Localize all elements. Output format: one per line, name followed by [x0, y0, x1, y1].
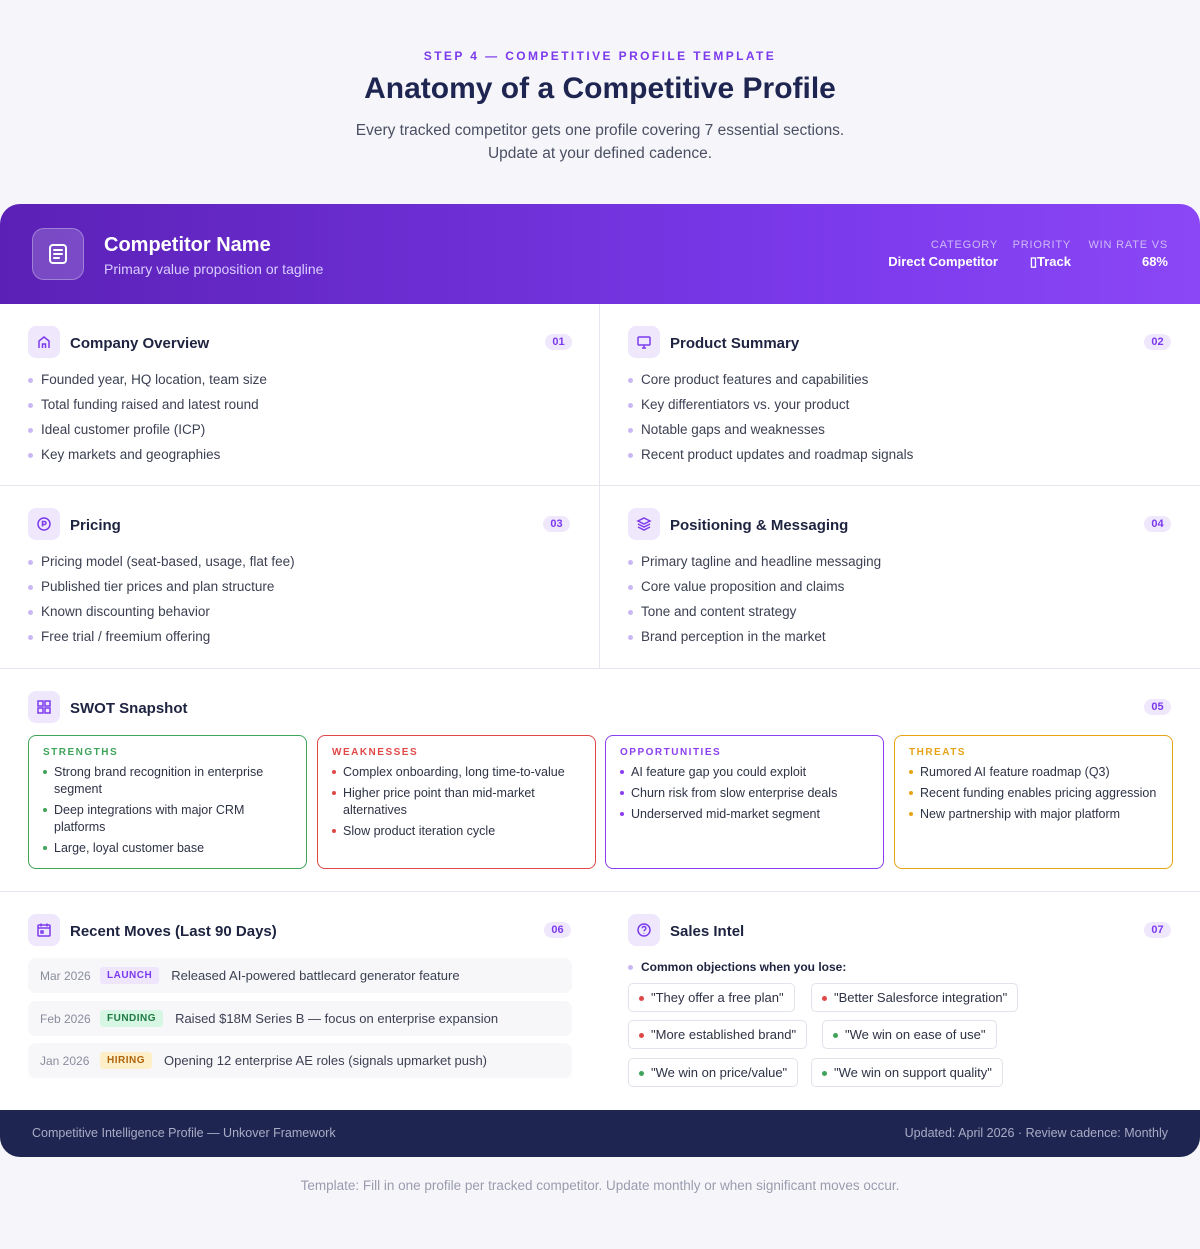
swot: opportunities: OPPORTUNITIES	[620, 747, 721, 758]
bullets: Core product features and capabilities	[641, 372, 868, 387]
move: launch	[28, 958, 572, 993]
footer bar: Updated: April 2026 · Review cadence: Monthly	[905, 1126, 1168, 1140]
bullets: Key differentiators vs. your product	[641, 397, 849, 412]
panel: sales intel: "More established brand"	[651, 1027, 796, 1042]
bullets: Primary tagline and headline messaging	[641, 554, 881, 569]
swot: strengths	[28, 735, 307, 869]
heading: Pricing	[70, 517, 121, 534]
objections label: Common objections when you lose:	[641, 960, 846, 974]
template note: Template: Fill in one profile per tracked competitor. Update monthly or when significant moves occur.	[301, 1178, 899, 1193]
swot: strengths: Strong brand recognition in enterprise segment	[54, 765, 263, 796]
heading: Positioning & Messaging	[670, 517, 848, 534]
panel: sales intel: "We win on ease of use"	[845, 1027, 986, 1042]
title: Anatomy of a Competitive Profile	[364, 72, 836, 105]
badge	[1144, 922, 1171, 938]
footer bar	[0, 1110, 1200, 1157]
swot: weaknesses: Complex onboarding, long time-to-value	[343, 765, 565, 779]
meta: priority	[1013, 239, 1071, 269]
swot: opportunities: AI feature gap you could exploit	[631, 765, 806, 779]
heading: Recent Moves (Last 90 Days)	[70, 923, 277, 940]
bullets: Free trial / freemium offering	[41, 629, 210, 644]
swot: strengths: Large, loyal customer base	[54, 841, 204, 855]
move: launch: Mar 2026	[40, 968, 91, 982]
move: funding: FUNDING	[107, 1013, 156, 1024]
panel: product summary	[628, 326, 1171, 462]
panel: sales intel: "We win on support quality"	[834, 1065, 992, 1080]
subtitle: Update at your defined cadence.	[488, 145, 712, 162]
bullets: Key markets and geographies	[41, 447, 220, 462]
bullets: Founded year, HQ location, team size	[41, 372, 267, 387]
panel: sales intel: "Better Salesforce integration"	[834, 990, 1007, 1005]
swot: threats: THREATS	[909, 747, 966, 758]
subtitle	[356, 122, 844, 162]
meta: priority: PRIORITY	[1013, 239, 1071, 251]
bullets	[628, 554, 881, 644]
swot: weaknesses: Slow product iteration cycle	[343, 824, 495, 838]
icon: help	[628, 914, 660, 946]
icon: calendar	[28, 914, 60, 946]
swot: threats: Rumored AI feature roadmap (Q3)	[920, 765, 1110, 779]
bullets: Total funding raised and latest round	[41, 397, 259, 412]
swot: opportunities: Underserved mid-market segment	[631, 807, 820, 821]
meta: win rate: 68%	[1142, 254, 1168, 269]
panel: SWOT	[28, 691, 1171, 723]
badge: 07	[1151, 924, 1164, 936]
meta: category: Direct Competitor	[888, 254, 998, 269]
bullets	[28, 372, 267, 462]
heading: SWOT Snapshot	[70, 700, 188, 717]
panel: pricing	[28, 508, 570, 644]
meta: win rate: WIN RATE VS	[1088, 239, 1168, 251]
move: launch: Released AI-powered battlecard generator feature	[171, 968, 460, 983]
badge: 03	[550, 518, 563, 530]
footer bar: Competitive Intelligence Profile — Unkover Framework	[32, 1126, 336, 1140]
badge	[1144, 334, 1171, 350]
swot: weaknesses: Higher price point than mid-market alternatives	[343, 786, 535, 817]
bullets	[28, 554, 295, 644]
swot: strengths: STRENGTHS	[43, 747, 118, 758]
heading: Sales Intel	[670, 923, 744, 940]
heading: Product Summary	[670, 335, 799, 352]
icon: monitor	[628, 326, 660, 358]
move: hiring: Opening 12 enterprise AE roles (signals upmarket push)	[164, 1053, 487, 1068]
panel: company overview	[28, 326, 572, 462]
move: funding: Feb 2026	[40, 1012, 91, 1026]
heading: Company Overview	[70, 335, 209, 352]
bullets	[628, 372, 913, 462]
meta: category	[888, 239, 998, 269]
swot: opportunities	[605, 735, 884, 869]
icon: grid	[28, 691, 60, 723]
badge	[544, 922, 571, 938]
swot: weaknesses	[317, 735, 596, 869]
badge: 04	[1151, 518, 1164, 530]
panel: sales intel	[628, 914, 1171, 1087]
badge: 01	[552, 336, 565, 348]
move: funding: Raised $18M Series B — focus on enterprise expansion	[175, 1011, 498, 1026]
subtitle: Every tracked competitor gets one profile covering 7 essential sections.	[356, 122, 844, 139]
badge: 06	[551, 924, 564, 936]
bullets: Pricing model (seat-based, usage, flat fee)	[41, 554, 295, 569]
swot: threats: Recent funding enables pricing aggression	[920, 786, 1156, 800]
meta: priority: ▯Track	[1030, 254, 1071, 269]
swot: threats: New partnership with major platform	[920, 807, 1120, 821]
move: hiring: Jan 2026	[40, 1054, 89, 1068]
swot: threats	[894, 735, 1173, 869]
panel: sales intel: "We win on price/value"	[651, 1065, 787, 1080]
pills	[628, 983, 795, 1012]
swot: strengths: Deep integrations with major CRM platforms	[54, 803, 244, 834]
badge: 02	[1151, 336, 1164, 348]
swot: weaknesses: WEAKNESSES	[332, 747, 418, 758]
badge	[543, 516, 570, 532]
bullets: Known discounting behavior	[41, 604, 210, 619]
competitor name: Competitor Name	[104, 234, 271, 256]
badge	[1144, 699, 1171, 715]
panel: recent moves	[28, 914, 571, 1069]
panel: positioning	[628, 508, 1171, 644]
move: hiring	[28, 1043, 572, 1078]
badge	[1144, 516, 1171, 532]
tagline: Primary value proposition or tagline	[104, 261, 323, 277]
icon: layers	[628, 508, 660, 540]
icon: coin	[28, 508, 60, 540]
bullets: Core value proposition and claims	[641, 579, 844, 594]
icon: document logo	[32, 228, 84, 280]
bullets: Published tier prices and plan structure	[41, 579, 274, 594]
icon: home	[28, 326, 60, 358]
move: funding	[28, 1001, 572, 1036]
bullets: Tone and content strategy	[641, 604, 796, 619]
bullets: Recent product updates and roadmap signals	[641, 447, 913, 462]
profile card	[0, 204, 1200, 1157]
header banner	[0, 204, 1200, 304]
bullets: Ideal customer profile (ICP)	[41, 422, 205, 437]
badge: 05	[1151, 701, 1164, 713]
eyebrow: STEP 4 — COMPETITIVE PROFILE TEMPLATE	[424, 49, 776, 63]
meta: category: CATEGORY	[931, 239, 998, 251]
meta: win rate	[1088, 239, 1168, 269]
pills: "They offer a free plan"	[651, 990, 784, 1005]
bullets: Notable gaps and weaknesses	[641, 422, 825, 437]
move: launch: LAUNCH	[107, 970, 152, 981]
swot: opportunities: Churn risk from slow enterprise deals	[631, 786, 837, 800]
bullets: Brand perception in the market	[641, 629, 826, 644]
move: hiring: HIRING	[107, 1055, 145, 1066]
badge	[545, 334, 572, 350]
